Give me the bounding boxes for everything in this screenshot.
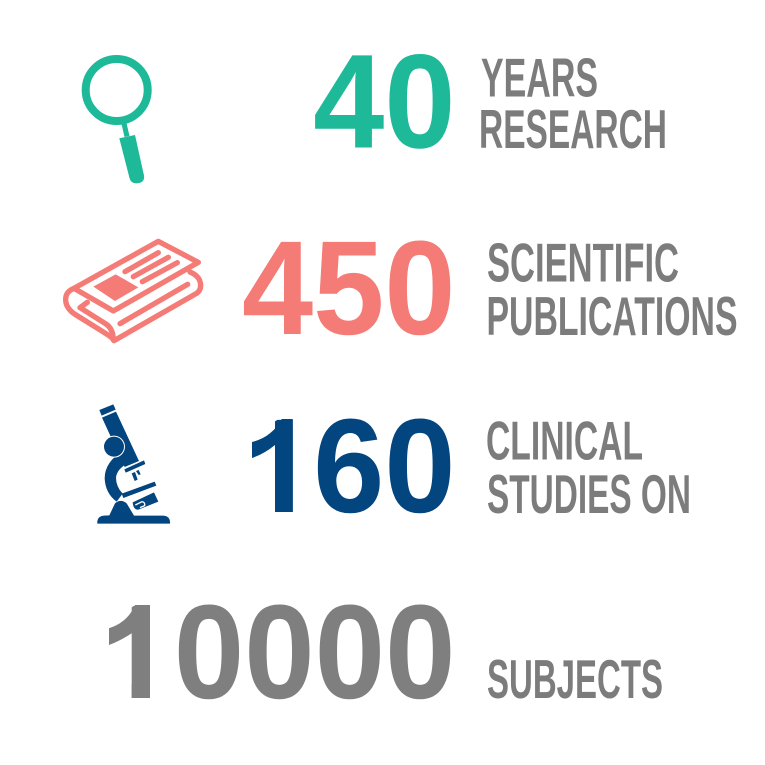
number: 450: 450 [242, 212, 456, 363]
row: scientific publications [66, 212, 737, 363]
number: 40: 40 [313, 26, 456, 176]
icon: microscope [97, 404, 170, 524]
label: clinical studies on: CLINICAL [486, 410, 643, 472]
number: 160: 60 [313, 390, 456, 541]
label: scientific publications [486, 232, 738, 347]
number: 160: 1 [246, 390, 318, 541]
number: 10000: 10000 [103, 577, 456, 727]
row: subjects [100, 577, 663, 727]
number: 160 [244, 390, 456, 541]
label: clinical studies on [486, 410, 691, 525]
row: years of research [86, 26, 667, 183]
label: years research: YEARS [481, 46, 598, 108]
label: years research [479, 46, 667, 160]
row: clinical studies [97, 390, 691, 541]
icon: folded newspaper [66, 241, 201, 341]
icon: magnifying glass [86, 59, 148, 183]
